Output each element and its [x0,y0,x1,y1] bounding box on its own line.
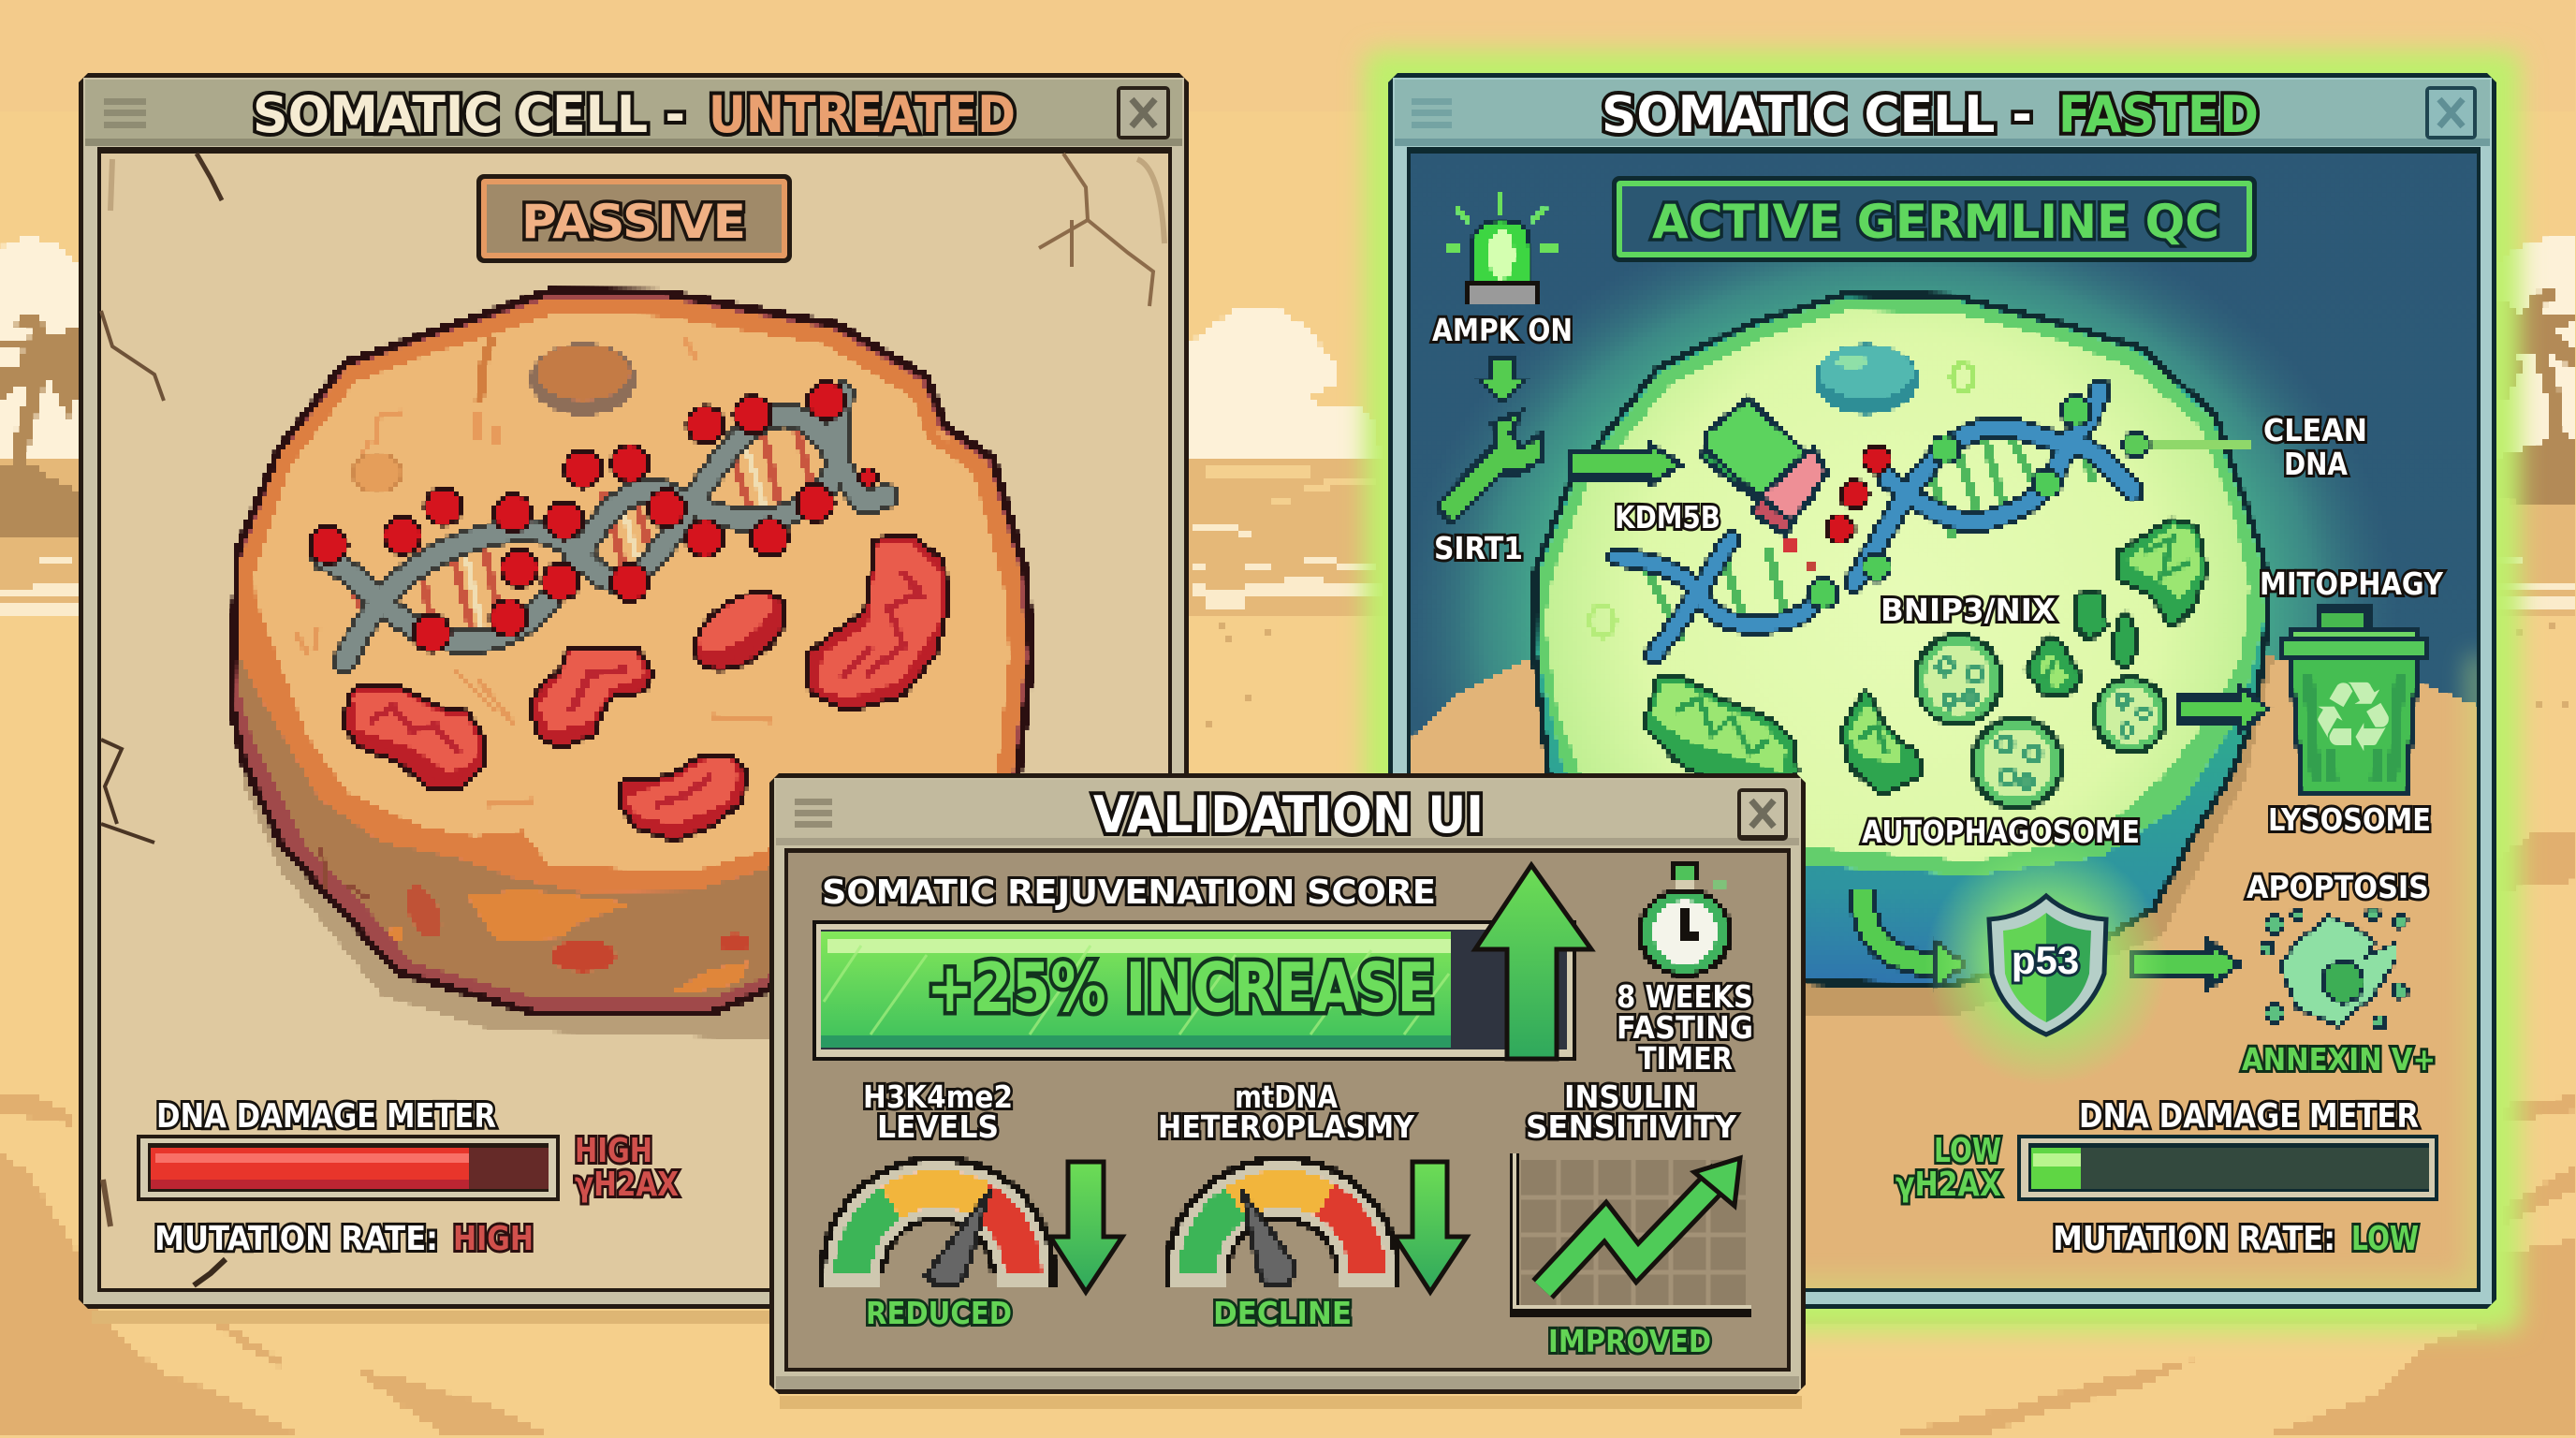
metric: mtDNA heteroplasmy: mtDNA [1235,1078,1338,1115]
title: FASTED [2058,85,2259,144]
cracks [101,154,1164,1285]
labels on the pathway [1432,312,2444,1078]
apoptotic cell [2261,908,2408,1029]
lower DNA fragment [1617,540,1822,655]
cell lower body [1534,294,2268,986]
score progress bar: +25% INCREASE [927,948,1435,1027]
rim damage patches [467,889,634,941]
icon: AMPK siren [1444,192,1559,304]
left palm [0,316,84,540]
timer caption: 8 WEEKS [1617,978,1753,1015]
shield: p53: p53 [2012,938,2079,982]
nucleus [1814,344,1919,415]
window frame [1388,73,2496,1309]
DNA damage meter: HIGH [575,1132,652,1170]
metric: H3K4me2 levels: REDUCED [866,1295,1012,1331]
badge: passive [476,174,792,263]
timer caption: TIMER [1638,1040,1733,1077]
icon: window menu [1412,98,1452,128]
arrow: SIRT1 to KDM5B [1570,444,1681,485]
cell body [232,291,1032,1013]
title: UNTREATED [709,85,1016,144]
shield: p53 [1925,843,2168,1086]
icon: window menu [795,799,832,828]
metric: insulin sensitivity [1515,1078,1751,1359]
metric: insulin sensitivity: SENSITIVITY [1526,1108,1737,1145]
icon: stopwatch [1637,863,1733,977]
title [253,85,1016,144]
window frame [769,773,1806,1394]
labels on the pathway: DNA [2284,446,2348,482]
mutation rate: MUTATION RATE: [2053,1220,2335,1258]
DNA damage meter: γH2AX [575,1166,679,1204]
cell shadow [242,655,777,1039]
labels on the pathway: APOPTOSIS [2247,869,2429,905]
inner panel glow [1685,655,2477,1288]
backdrop teal and sand [1411,154,2477,740]
title [1602,85,2259,144]
labels on the pathway: AMPK ON [1432,312,1573,348]
curved arrow: to p53 [1863,891,1938,964]
mutation rate: HIGH [453,1220,534,1258]
arrow: AMPK to SIRT1 [1479,359,1526,403]
mutation rate: LOW [2351,1220,2419,1258]
icon: lysosome bin [2280,609,2426,794]
icon: close button [1737,788,1788,841]
gauge: H3K4me2 [824,1160,1052,1287]
metric: insulin sensitivity: IMPROVED [1548,1323,1711,1359]
labels on the pathway: SIRT1 [1434,530,1523,566]
timer caption: FASTING [1617,1009,1753,1046]
icon: close button [2425,86,2477,139]
metric: H3K4me2 levels: LEVELS [877,1108,999,1145]
labels on the pathway: BNIP3/NIX [1881,592,2056,628]
cell rim [1538,298,2264,875]
upper DNA [1854,389,2133,582]
badge: active germline QC [1612,176,2257,262]
labels on the pathway: MITOPHAGY [2260,565,2444,602]
title: VALIDATION UI [1093,785,1484,844]
metric: mtDNA heteroplasmy [1158,1078,1467,1331]
metric: H3K4me2 levels: H3K4me2 [863,1078,1013,1115]
icon: close button [1117,86,1170,139]
score progress bar [812,920,1576,1061]
clean DNA pointer [2123,432,2253,458]
labels on the pathway: LYSOSOME [2268,801,2431,838]
cell membrane rim [238,298,1025,892]
mutation rate: MUTATION RATE: [154,1220,438,1258]
title: SOMATIC CELL - [253,85,685,144]
illustration: damaged cell [232,291,1032,1039]
labels on the pathway: CLEAN [2263,412,2367,448]
line chart [1515,1153,1751,1313]
arrow: score up [1475,865,1591,1059]
sand specks [1206,613,2566,726]
outer green glow [1365,51,2520,1331]
arrow: heteroplasmy down [1395,1162,1467,1292]
DNA helix with damage markers [324,393,886,662]
cytoplasm [255,313,1009,873]
mitochondria [348,540,942,834]
damage fragments [1826,446,1891,543]
DNA damage meter: γH2AX [1895,1166,2001,1204]
right palm [2490,290,2576,504]
window frame [79,73,1189,1309]
DNA damage meter: LOW [1934,1132,2001,1170]
metric: insulin sensitivity: INSULIN [1564,1078,1697,1115]
metric: mtDNA heteroplasmy: DECLINE [1213,1295,1352,1331]
panel: validation UI [769,773,1806,1394]
badge: active germline QC: ACTIVE GERMLINE QC [1652,195,2219,249]
arrow: to lysosome [2178,686,2268,732]
DNA damage meter [137,1097,679,1204]
DNA damage meter: DNA DAMAGE METER [2079,1097,2419,1136]
cell shadow [1806,655,2275,1016]
arrow: levels down [1050,1162,1122,1292]
icon: SIRT1 wrench [1437,412,1543,524]
DNA damage meter: DNA DAMAGE METER [156,1097,496,1136]
timer caption [1617,978,1753,1077]
arrow: p53 to apoptosis [2130,941,2239,988]
labels on the pathway: KDM5B [1615,499,1720,536]
title: SOMATIC CELL - [1602,85,2032,144]
gauge: mtDNA [1168,1160,1397,1287]
nucleus [530,343,637,416]
labels on the pathway: AUTOPHAGOSOME [1862,814,2140,850]
cytoplasm [1544,311,2249,861]
DNA damage meter [1895,1097,2438,1204]
sand dunes [0,833,2576,1438]
score label: SOMATIC REJUVENATION SCORE [822,873,1436,912]
labels on the pathway: ANNEXIN V+ [2242,1041,2436,1078]
badge: passive: PASSIVE [521,195,746,249]
icon: window menu [104,98,146,128]
metric: H3K4me2 levels [824,1078,1122,1331]
illustration: fasted cell scene [1404,152,2481,1292]
eraser KDM5B [1703,399,1827,536]
mitochondria and autophagosomes [1649,524,2202,789]
panel: somatic cell fasted [1365,51,2520,1331]
recycle symbol: ♻ [2309,660,2397,774]
metric: mtDNA heteroplasmy: HETEROPLASMY [1158,1108,1415,1145]
panel: somatic cell untreated [79,73,1189,1309]
